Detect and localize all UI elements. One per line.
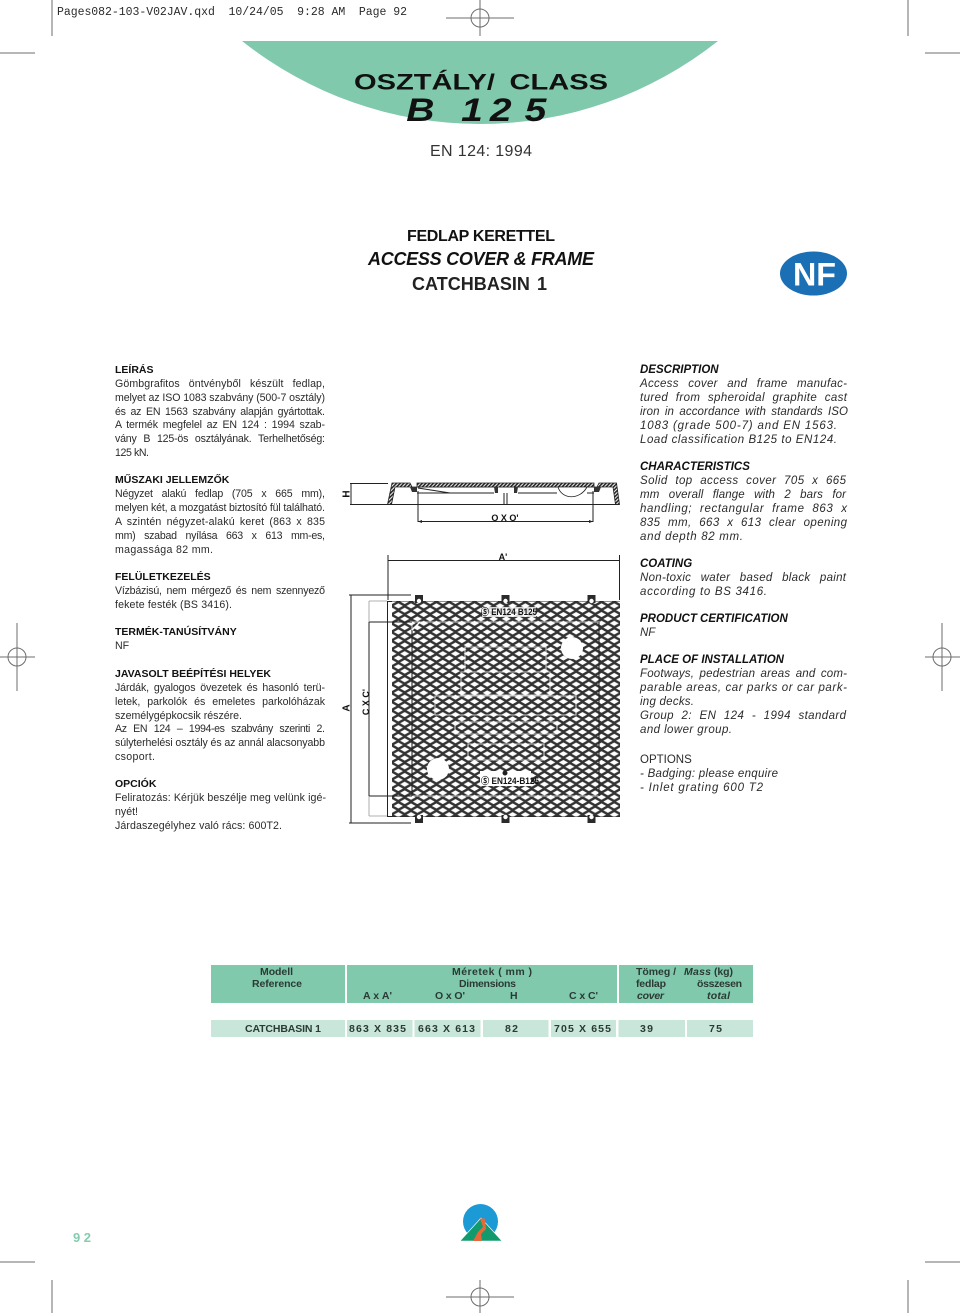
inner cover outline	[412, 622, 599, 796]
table row: catchbasin 1: CATCHBASIN 1	[245, 1023, 321, 1035]
diamond mesh grating	[392, 602, 620, 816]
left column: Hungarian text	[115, 363, 326, 832]
section: leírás: vány B 125-ös osztályának. Terhelhetőség:	[115, 433, 325, 445]
dimension C x C'	[361, 601, 412, 816]
table: dimensions and mass	[211, 965, 753, 1037]
section: characteristics	[640, 461, 848, 543]
section: műszaki jellemzők	[115, 473, 325, 556]
label: O x O': O X O'	[491, 513, 519, 523]
table header: Méretek ( mm )	[452, 966, 532, 978]
section: leírás	[115, 363, 325, 459]
table header: (kg)	[714, 966, 733, 978]
table header: fedlap	[636, 978, 666, 990]
section: javasolt beépítési helyek	[115, 667, 326, 763]
section: felületkezelés: Vízbázisú, nem mérgező és nem szennyező	[115, 585, 325, 597]
section: place of installation: Footways, pedestrian areas and com-	[640, 668, 847, 680]
section: leírás: melyet az ISO 1083 szabvány (500-7 osztály)	[115, 392, 325, 404]
icon: NF certification mark	[780, 252, 847, 296]
print slug line: Pages082-103-V02JAV.qxd 10/24/05 9:28 AM Page 92	[57, 6, 407, 19]
section: leírás: Gömbgrafitos öntvényből készült fedlap,	[115, 378, 325, 390]
dimension C x C': C X C'	[361, 689, 371, 715]
section: javasolt beépítési helyek: súlyterhelési osztály és az annál alacsonyabb	[115, 737, 325, 749]
section: description: DESCRIPTION	[640, 364, 719, 376]
section: javasolt beépítési helyek: JAVASOLT BEÉPÍTÉSI HELYEK	[115, 667, 271, 680]
marking plate bottom	[480, 770, 539, 786]
right column: English text	[639, 364, 848, 794]
section: characteristics: CHARACTERISTICS	[640, 461, 750, 473]
section: leírás: LEÍRÁS	[115, 363, 154, 376]
section: characteristics: mm overall flange with 2 bars for	[640, 489, 847, 501]
section: opciók: Járdaszegélyhez való rács: 600T2.	[115, 820, 282, 832]
section: opciók: nyét!	[115, 806, 138, 818]
marking plate top: Ⓢ EN124 B125	[481, 606, 537, 617]
marking plate bottom: Ⓢ EN124-B125	[481, 775, 539, 786]
section: options: - Badging: please enquire	[640, 768, 778, 780]
table header: total	[707, 990, 731, 1002]
section: opciók	[115, 777, 326, 832]
section: coating: Non-toxic water based black paint	[640, 572, 847, 584]
section: javasolt beépítési helyek: személygépkocsik részére.	[115, 710, 242, 722]
section: place of installation: parable areas, car parks or car park-	[639, 682, 847, 694]
section: opciók: Feliratozás: Kérjük beszélje meg velünk igé-	[115, 792, 326, 804]
section: product certification: PRODUCT CERTIFICATION	[640, 613, 788, 625]
section: description: Access cover and frame manufac-	[639, 378, 847, 390]
section: place of installation: Group 2: EN 124 - 1994 standard	[640, 710, 847, 722]
table header: Tömeg /	[636, 966, 676, 978]
standard: EN 124: 1994	[430, 143, 532, 160]
section: opciók: OPCIÓK	[115, 777, 157, 790]
section: product certification	[640, 613, 788, 639]
table header: cover	[637, 990, 665, 1002]
section: műszaki jellemzők: A szintén négyzet-alakú keret (863 x 835	[115, 516, 325, 528]
section: description: iron in accordance with standards ISO	[640, 406, 848, 418]
section: termék-tanúsítvány: TERMÉK-TANÚSÍTVÁNY	[115, 625, 237, 638]
label: H: H	[342, 490, 352, 498]
table row: catchbasin 1: 663 X 613	[418, 1023, 475, 1035]
section: place of installation: and lower group.	[640, 724, 732, 736]
section: options	[640, 754, 778, 794]
section: javasolt beépítési helyek: Az EN 124 – 1994-es szabvány szerinti 2.	[115, 723, 325, 735]
section: felületkezelés: FELÜLETKEZELÉS	[115, 570, 211, 583]
technical drawing: plan view	[342, 552, 620, 823]
section: coating	[640, 558, 847, 598]
table header: Reference	[252, 978, 302, 990]
section: javasolt beépítési helyek: letek, parkolók és emeletes parkolóházak	[115, 696, 326, 708]
product heading: FEDLAP KERETTEL	[407, 228, 555, 245]
outer frame	[388, 602, 620, 816]
section: leírás: A termék megfelel az EN 124 : 1994 szab-	[115, 419, 325, 431]
section: műszaki jellemzők: Négyzet alakú fedlap (705 x 665 mm),	[115, 488, 325, 500]
product heading	[367, 228, 595, 294]
section: műszaki jellemzők: MŰSZAKI JELLEMZŐK	[115, 473, 230, 486]
section: description: tured from spheroidal graphite cast	[640, 392, 848, 404]
section: javasolt beépítési helyek: csoport.	[115, 751, 155, 763]
table header	[211, 965, 753, 1003]
section: options: - Inlet grating 600 T2	[640, 782, 764, 794]
section: műszaki jellemzők: mm) szabad nyílása 663 x 613 mm-es,	[115, 530, 325, 542]
page number: 92	[73, 1230, 91, 1245]
lugs	[415, 595, 596, 823]
section: product certification: NF	[640, 627, 656, 639]
section: termék-tanúsítvány: NF	[115, 640, 130, 652]
section: description	[639, 364, 848, 446]
product heading: CATCHBASIN 1	[412, 274, 547, 294]
icon: NF certification mark: NF	[793, 256, 836, 292]
table header: összesen	[697, 978, 742, 990]
section: description: 1083 (grade 500-7) and EN 1563.	[640, 420, 837, 432]
product heading: ACCESS COVER & FRAME	[367, 249, 595, 269]
lifting holes	[427, 637, 583, 780]
section: characteristics: and depth 82 mm.	[640, 531, 743, 543]
section: leírás: és az EN 1563 szabvány alapján gyártottak.	[115, 406, 325, 418]
table row: catchbasin 1: 75	[709, 1023, 722, 1035]
section: leírás: 125 kN.	[115, 447, 149, 459]
table header: C x C'	[569, 990, 598, 1002]
dimension A': A'	[499, 552, 507, 562]
section: coating: COATING	[640, 558, 692, 570]
dimension A'	[388, 552, 620, 600]
dimension A	[342, 595, 411, 823]
section: felületkezelés: fekete festék (BS 3416).	[115, 599, 232, 611]
section: characteristics: Solid top access cover 705 x 665	[640, 475, 847, 487]
table row: catchbasin 1	[211, 1020, 753, 1037]
green header shape	[242, 41, 718, 124]
title: B 125: B 125	[406, 92, 548, 128]
frame profile	[388, 483, 620, 504]
table row: catchbasin 1: 39	[640, 1023, 653, 1035]
table header: Dimensions	[459, 978, 516, 990]
section: place of installation: PLACE OF INSTALLATION	[640, 654, 785, 666]
section: options: OPTIONS	[640, 754, 692, 766]
table row: catchbasin 1: 705 X 655	[554, 1023, 611, 1035]
section: javasolt beépítési helyek: Járdák, gyalogos övezetek és hasonló terü-	[115, 682, 325, 694]
dimension A: A	[342, 704, 352, 712]
table header: Modell	[260, 966, 293, 978]
section: felületkezelés	[115, 570, 325, 611]
table row: catchbasin 1: 863 X 835	[349, 1023, 406, 1035]
icon: company logo	[460, 1204, 502, 1241]
section: műszaki jellemzők: magassága 82 mm.	[115, 544, 213, 556]
table header: H	[510, 990, 518, 1002]
table header: Mass	[684, 966, 711, 978]
table header: O x O'	[435, 990, 465, 1002]
section: place of installation: ing decks.	[640, 696, 694, 708]
section: coating: according to BS 3416.	[640, 586, 767, 598]
section: description: Load classification B125 to EN124.	[640, 434, 837, 446]
section: characteristics: handling; rectangular frame 863 x	[640, 503, 848, 515]
section: műszaki jellemzők: melyen két, a mozgatást biztosító fül található.	[115, 502, 325, 514]
section: place of installation	[639, 654, 847, 736]
section: characteristics: 835 mm, 663 x 613 clear opening	[640, 517, 848, 529]
title: class: OSZTÁLY/ CLASS	[354, 70, 608, 94]
table header: A x A'	[363, 990, 392, 1002]
table row: catchbasin 1: 82	[505, 1023, 518, 1035]
technical drawing: cross-section	[342, 483, 620, 523]
section: termék-tanúsítvány	[115, 625, 237, 652]
